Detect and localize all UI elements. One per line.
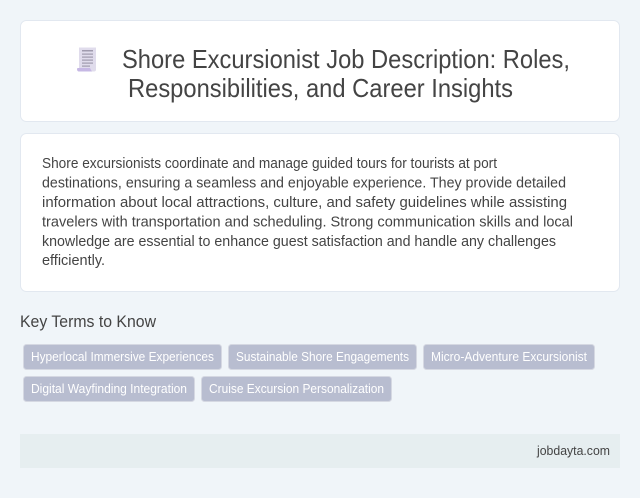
description text: destinations, ensuring a seamless and enjoyable experience. They provide detailed — [42, 176, 566, 192]
chip: cruise excursion: Cruise Excursion Personalization — [209, 382, 384, 396]
description panel — [20, 134, 620, 292]
icon: document scroll — [77, 48, 96, 72]
chip: sustainable: Sustainable Shore Engagements — [236, 350, 409, 364]
chip: digital wayfinding — [24, 376, 194, 402]
chip: hyperlocal: Hyperlocal Immersive Experiences — [31, 350, 214, 364]
header panel — [20, 20, 620, 122]
description text: efficiently. — [42, 253, 105, 269]
chip: micro-adventure — [424, 344, 594, 370]
description text: Shore excursionists coordinate and manage guided tours for tourists at port — [42, 156, 497, 172]
key term chips — [24, 344, 594, 402]
chip: hyperlocal — [24, 344, 222, 370]
description text — [42, 156, 573, 269]
footer source text: jobdayta.com — [536, 444, 610, 458]
footer bar — [20, 434, 620, 468]
title: Shore Excursionist Job Description: Roles, — [122, 44, 570, 74]
section heading: key terms: Key Terms to Know — [20, 313, 156, 331]
title — [122, 44, 570, 103]
description text: knowledge are essential to enhance guest satisfaction and handle any challenges — [42, 234, 556, 250]
description text: information about local attractions, culture, and safety guidelines while assisting — [42, 195, 567, 211]
chip: sustainable — [228, 344, 416, 370]
description text: travelers with transportation and scheduling. Strong communication skills and local — [42, 214, 573, 230]
chip: digital wayfinding: Digital Wayfinding Integration — [31, 382, 187, 396]
chip: micro-adventure: Micro-Adventure Excursionist — [431, 350, 587, 364]
chip: cruise excursion — [202, 376, 392, 402]
title: Responsibilities, and Career Insights — [128, 73, 513, 103]
